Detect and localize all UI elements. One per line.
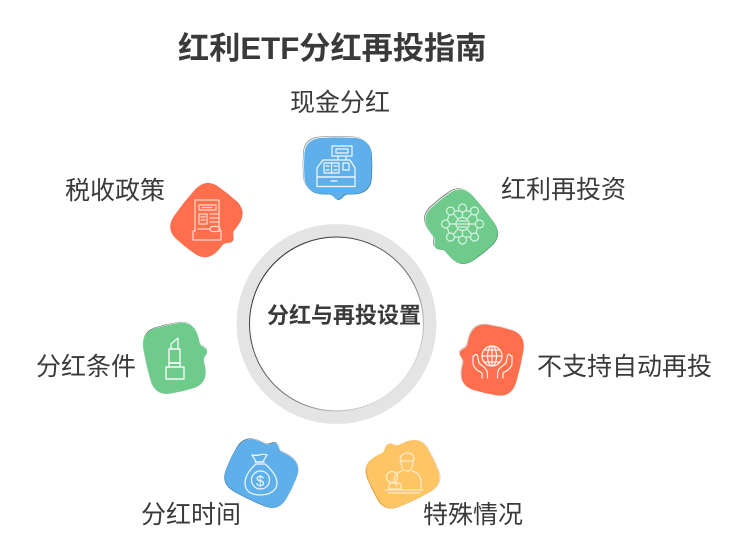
label: special cases: 特殊情况 bbox=[423, 501, 523, 529]
label: dividend time: 分红时间 bbox=[141, 501, 241, 529]
center label: 分红与再投设置 bbox=[267, 303, 421, 328]
label: no auto reinvest: 不支持自动再投 bbox=[537, 353, 712, 381]
title: 红利ETF分红再投指南 bbox=[178, 31, 486, 66]
center circle bbox=[243, 230, 430, 418]
badge: cash register bbox=[303, 136, 372, 200]
icon: money bag: $ bbox=[256, 473, 265, 490]
icon: person at desk bbox=[385, 453, 423, 493]
label: reinvest dividends: 红利再投资 bbox=[501, 176, 626, 204]
badge: network bbox=[413, 181, 505, 274]
icon: cash register bbox=[317, 146, 355, 186]
badge: chef at desk bbox=[357, 429, 447, 515]
badge: document form bbox=[163, 176, 254, 268]
icon: globe in hands bbox=[473, 346, 512, 378]
label: tax policy: 税收政策 bbox=[65, 177, 165, 205]
badge: globe in hands bbox=[452, 319, 528, 400]
label: dividend conditions: 分红条件 bbox=[36, 353, 136, 381]
icon: document form bbox=[193, 200, 221, 240]
icon: lipstick bbox=[166, 338, 184, 379]
label: cash dividend: 现金分红 bbox=[290, 89, 390, 117]
badge: lipstick bbox=[139, 317, 215, 398]
icon: network bbox=[442, 204, 484, 244]
badge: money bag bbox=[218, 428, 307, 514]
